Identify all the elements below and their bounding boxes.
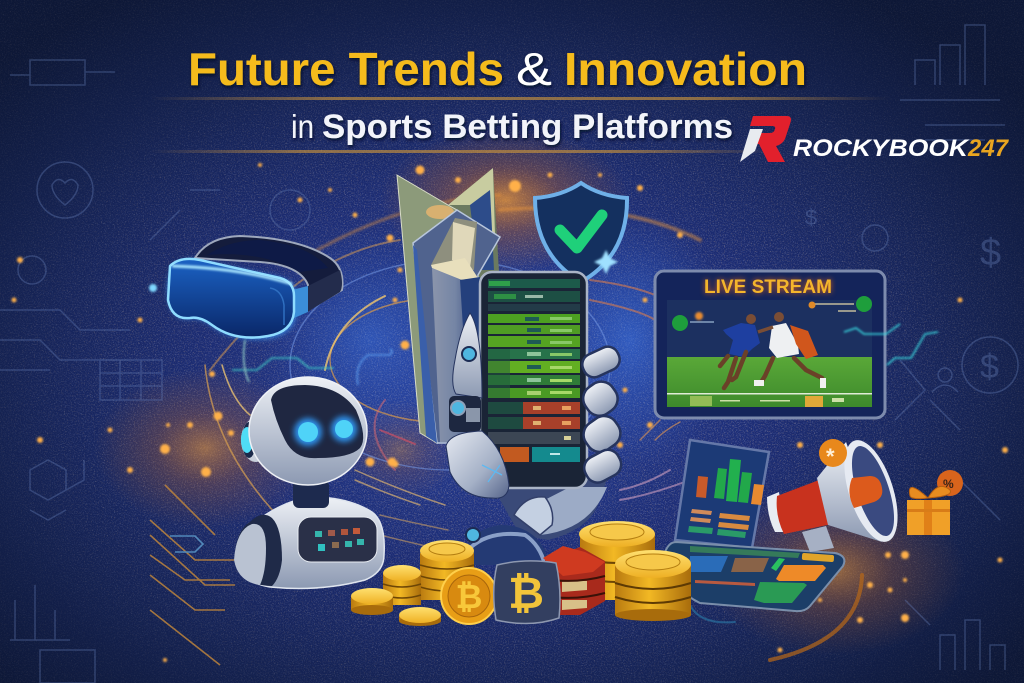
subtitle: Sports Betting Platforms: [322, 108, 733, 146]
stream field: [667, 357, 872, 407]
bitcoin coin: [441, 568, 497, 624]
live stream heading: LIVE STREAM: [704, 277, 832, 298]
coin stack front right: [615, 550, 691, 621]
particles: [12, 163, 1008, 662]
icon: megaphone: [767, 434, 908, 552]
title: Future Trends: [188, 43, 504, 95]
robot body: [236, 497, 384, 588]
stream badges: [672, 296, 872, 331]
icon: gift box with discount: %: [943, 477, 954, 491]
bitcoin coin: ₿: [456, 578, 482, 615]
robot chest panel: [298, 517, 377, 562]
robot ear: [241, 418, 271, 462]
bar chart: [696, 459, 764, 505]
robot eyes: [294, 416, 357, 446]
robot face: [271, 385, 363, 458]
odds rows green: [488, 314, 580, 398]
background faint icons, right: $: [980, 348, 999, 386]
subtitle: in: [291, 108, 314, 145]
gold circuit traces, lower left: [150, 485, 240, 665]
player in white: [754, 312, 826, 388]
player in blue: [720, 314, 760, 388]
icon: megaphone: *: [826, 444, 835, 469]
poker chips: [543, 546, 605, 615]
title rule lower: [150, 150, 770, 153]
circuit connector: [232, 340, 392, 385]
icon: security shield: [535, 183, 627, 282]
coin stack small: [383, 565, 421, 605]
icon: VR headset: [149, 236, 342, 339]
coin stack tall: [420, 540, 474, 600]
single coin: [399, 607, 441, 626]
odds rows red: [488, 402, 580, 444]
coins and chips: [351, 521, 691, 626]
orbit rings: [205, 195, 862, 660]
title rule upper: [150, 97, 890, 100]
robot hand, rear palm: [462, 470, 610, 565]
phone header rows: [488, 279, 580, 311]
stream sky: [667, 300, 872, 358]
robot hand, fingers: [578, 343, 626, 487]
stream scoreboard: [667, 393, 872, 407]
trend lines: [844, 324, 938, 365]
bitcoin badge: ₿: [508, 569, 544, 618]
background faint icons, right: $: [805, 205, 817, 230]
coin stack left: [351, 588, 393, 615]
icon: robot assistant: [234, 377, 384, 588]
robot hand, thumb and forearm: [446, 313, 509, 498]
logo: Rockybook247: [740, 116, 1010, 162]
robot arm: [234, 515, 282, 586]
logo: Rockybook247: ROCKYBOOK: [793, 135, 970, 162]
coin stack back right: [579, 521, 655, 600]
betting keypad panel: [664, 542, 844, 611]
bitcoin badge: [494, 561, 560, 624]
background circuits and faint icons, left: [0, 60, 310, 683]
phone with betting odds: [480, 272, 587, 488]
icon: gift box with discount: [907, 470, 963, 535]
background faint icons, right: [805, 25, 1018, 670]
background faint icons, right: $: [980, 232, 1001, 274]
phone action buttons: [500, 447, 580, 462]
analytics lists: [688, 509, 750, 538]
live stream tablet: [655, 271, 885, 418]
logo: Rockybook247: 247: [967, 135, 1010, 162]
robot head: [249, 377, 367, 485]
title: [188, 43, 807, 95]
icon: trophy: [397, 168, 500, 443]
title: &: [516, 43, 552, 95]
robot neck: [293, 480, 329, 508]
title: Innovation: [564, 43, 807, 95]
analytics tablet: [675, 440, 769, 548]
